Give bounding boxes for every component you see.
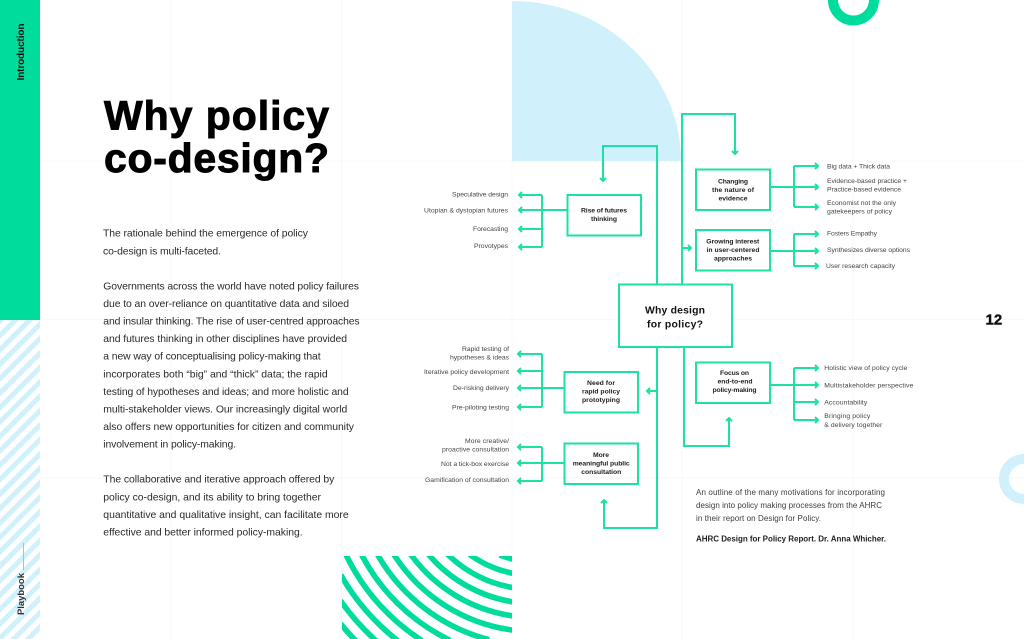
branch: need for rapid policy prototyping: Pre-piloting testing	[452, 404, 509, 412]
branch: need for rapid policy prototyping: De-risking delivery	[453, 385, 510, 392]
body paragraph: collaborative approach: policy co-design, and its ability to bring together	[103, 492, 322, 503]
body paragraph: collaborative approach: quantitative and qualitative insight, can facilitate more	[103, 510, 349, 521]
body paragraph: rationale: also offers new opportunities for citizen and community	[103, 422, 355, 433]
quarter circle decoration	[512, 1, 681, 161]
branch: rise of futures thinking: Utopian & dystopian futures	[424, 208, 509, 214]
body paragraph: rationale: a new way of conceptualising policy-making that	[103, 352, 321, 363]
green sidebar	[0, 0, 40, 320]
branch: need for rapid policy prototyping	[424, 346, 638, 412]
caption: in their report on Design for Policy.	[696, 514, 821, 523]
arrow: to user-centered	[682, 245, 691, 251]
branch: rise of futures thinking: thinking	[591, 216, 617, 223]
branch: more meaningful public consultation: meaningful public	[573, 460, 630, 468]
branch: focus on end-to-end policy-making: Bringing policy	[824, 413, 871, 420]
central box: Why design for policy?: Why design	[645, 306, 705, 316]
intro text: co-design is multi-faceted.	[103, 246, 221, 257]
connector: top left to futures	[600, 146, 657, 284]
branch: more meaningful public consultation: Gamification of consultation	[425, 477, 509, 484]
connector: bottom left to public consultation	[601, 347, 657, 528]
title	[104, 92, 329, 181]
branch: more meaningful public consultation: Not a tick-box exercise	[441, 461, 509, 468]
branch: need for rapid policy prototyping: Need for	[587, 380, 615, 387]
branch: more meaningful public consultation: More	[593, 452, 609, 459]
connector: bottom right to end-to-end	[684, 347, 732, 446]
branch: changing the nature of evidence: Evidence-based practice +	[827, 178, 907, 185]
body paragraph: rationale: Governments across the world have noted policy failures	[103, 281, 359, 292]
section label: Playbook: Playbook	[16, 572, 27, 615]
light blue ring decoration	[1004, 459, 1024, 499]
connector: top right to evidence	[682, 114, 738, 284]
intro text	[103, 229, 309, 257]
branch: rise of futures thinking: Provotypes	[474, 243, 509, 250]
branch: changing the nature of evidence: gatekeepers of policy	[827, 208, 893, 215]
branch: growing interest in user-centered approaches: Synthesizes diverse options	[827, 247, 911, 254]
body paragraph: rationale: and insular thinking. The rise of user-centred approaches	[103, 316, 360, 328]
branch: rise of futures thinking: Rise of futures	[581, 207, 627, 214]
caption: An outline of the many motivations for incorporating	[696, 488, 885, 497]
page number: 12	[986, 312, 1002, 328]
branch: need for rapid policy prototyping: hypotheses & ideas	[450, 354, 510, 362]
branch: growing interest in user-centered approaches: Growing interest	[706, 239, 760, 246]
branch: need for rapid policy prototyping: Rapid testing of	[462, 346, 509, 353]
caption	[696, 488, 886, 543]
branch: focus on end-to-end policy-making: end-to-end	[718, 379, 752, 386]
branch: changing the nature of evidence: the nature of	[712, 187, 755, 194]
branch: focus on end-to-end policy-making	[696, 362, 914, 429]
title: Why policy	[104, 92, 329, 138]
body paragraph: rationale: testing of hypotheses and ideas; and more holistic and	[103, 387, 349, 398]
branch: growing interest in user-centered approaches: in user-centered	[706, 247, 760, 254]
body paragraph: rationale: multi-stakeholder views. Our increasingly digital world	[103, 404, 348, 416]
branch: focus on end-to-end policy-making: Multistakeholder perspective	[824, 383, 914, 390]
caption: design into policy making processes from the AHRC	[696, 501, 882, 510]
branch: rise of futures thinking	[424, 192, 641, 250]
caption: AHRC Design for Policy Report. Dr. Anna Whicher.	[696, 534, 886, 543]
title: co-design?	[104, 135, 329, 181]
branch: focus on end-to-end policy-making: Focus on	[720, 370, 749, 377]
branch: need for rapid policy prototyping: prototyping	[582, 397, 620, 404]
branch: more meaningful public consultation: proactive consultation	[442, 446, 509, 454]
branch: need for rapid policy prototyping: rapid policy	[582, 389, 620, 396]
body paragraph: collaborative approach: effective and better informed policy-making.	[103, 528, 303, 538]
branch: changing the nature of evidence: Big data + Thick data	[827, 164, 890, 171]
branch: changing the nature of evidence: Changing	[718, 179, 748, 186]
branch: growing interest in user-centered approaches	[696, 230, 911, 270]
branch: focus on end-to-end policy-making: Accountability	[824, 399, 868, 406]
central box: Why design for policy?	[619, 284, 732, 347]
body paragraph: rationale: incorporates both “big” and “thick” data; the rapid	[103, 369, 328, 380]
branch: rise of futures thinking: Forecasting	[473, 226, 508, 233]
arrow: to rapid prototyping	[647, 388, 657, 394]
branch: more meaningful public consultation: consultation	[581, 469, 621, 476]
branch: changing the nature of evidence: evidence	[718, 195, 748, 202]
branch: growing interest in user-centered approaches: User research capacity	[826, 263, 896, 270]
branch: changing the nature of evidence	[696, 163, 907, 215]
body paragraph: collaborative approach: The collaborative and iterative approach offered by	[103, 475, 335, 486]
branch: more meaningful public consultation: More creative/	[465, 438, 509, 445]
green concentric arcs decoration	[342, 556, 512, 639]
central box: Why design for policy?: for policy?	[647, 320, 703, 330]
body paragraph: rationale: due to an over-reliance on quantitative data and siloed	[103, 299, 349, 310]
branch: changing the nature of evidence: Practice-based evidence	[827, 187, 901, 194]
intro text: The rationale behind the emergence of policy	[103, 229, 309, 240]
branch: growing interest in user-centered approaches: approaches	[714, 256, 752, 263]
branch: focus on end-to-end policy-making: policy-making	[712, 387, 756, 394]
body paragraph: rationale: and futures thinking in other disciplines have provided	[103, 334, 347, 345]
branch: rise of futures thinking: Speculative design	[452, 192, 508, 198]
striped sidebar	[0, 320, 40, 639]
branch: growing interest in user-centered approaches: Fosters Empathy	[827, 231, 878, 238]
branch: focus on end-to-end policy-making: & delivery together	[824, 422, 883, 429]
section label: Introduction: Introduction	[16, 24, 27, 80]
section label: Playbook	[16, 543, 27, 615]
green ring decoration	[833, 0, 874, 20]
body paragraph: rationale: involvement in policy-making.	[103, 440, 236, 451]
branch: changing the nature of evidence: Economist not the only	[827, 200, 897, 207]
body paragraph: collaborative approach	[103, 475, 349, 538]
branch: focus on end-to-end policy-making: Holistic view of policy cycle	[824, 365, 908, 372]
branch: more meaningful public consultation	[425, 438, 638, 484]
body paragraph: rationale	[103, 281, 360, 451]
branch: need for rapid policy prototyping: Iterative policy development	[424, 369, 509, 376]
